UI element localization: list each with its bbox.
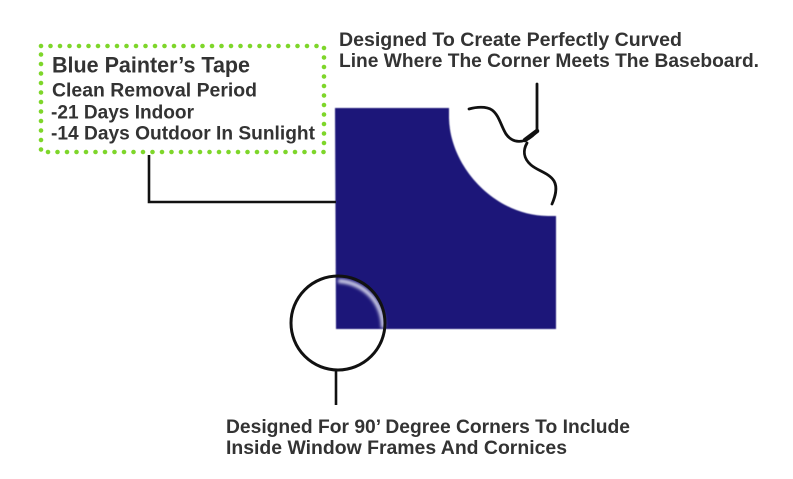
heading: curved line description: Line Where The Corner Meets The Baseboard. [339, 51, 759, 72]
icon: magnifier circle [291, 276, 385, 370]
callout box: tape details [41, 46, 324, 152]
highlight: worn corner arc [338, 281, 383, 328]
arrow: pointer with curved line [469, 84, 556, 204]
text: indoor days: -21 Days Indoor [51, 102, 195, 124]
text: corner description [226, 417, 630, 459]
heading: curved line description: Designed To Create Perfectly Curved [339, 30, 682, 51]
text: removal period: Clean Removal Period [52, 80, 257, 102]
panel: blue painter's tape corner piece [335, 108, 556, 329]
heading: product name: Blue Painter’s Tape [52, 52, 250, 78]
heading: curved line description [339, 30, 759, 72]
connector: circle to caption [335, 370, 337, 405]
text: outdoor days: -14 Days Outdoor In Sunlight [51, 124, 316, 144]
text: corner description: Inside Window Frames And Cornices [226, 438, 567, 459]
text: corner description: Designed For 90’ Degree Corners To Include [226, 417, 630, 438]
connector: callout to tape [149, 155, 336, 202]
